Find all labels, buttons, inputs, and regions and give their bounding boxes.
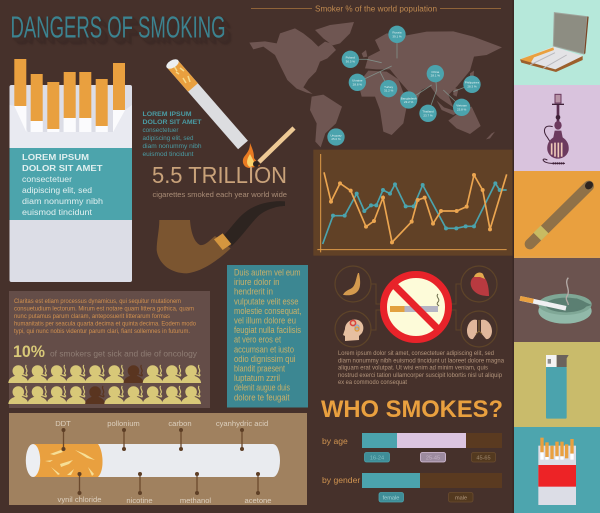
teal panel text: blandit praesent — [234, 364, 285, 374]
icon: pipe — [157, 201, 285, 273]
5.5 trillion statistic — [152, 162, 287, 199]
bubble labels: 28.3 % — [467, 84, 477, 88]
chemical labels: acetone — [244, 496, 272, 505]
icon: heart — [461, 266, 497, 302]
teal panel text — [234, 268, 302, 402]
panel: lighter tile — [514, 342, 600, 427]
map header: Smoker % of the world population — [315, 4, 437, 14]
pack label text: DOLOR SIT AMET — [22, 163, 103, 173]
lit cigarette illustration — [165, 57, 243, 145]
small lorem text block: adipiscing elit, sed — [142, 135, 194, 142]
teal panel text: at vero eros et — [234, 335, 281, 345]
health effects text — [338, 350, 505, 386]
panel: hookah tile — [514, 85, 600, 171]
bubble labels: Turkey — [384, 85, 394, 89]
oncology paragraph: Claritas est etiam processus dynamicus, qui sequitur mutationem — [14, 298, 181, 305]
world map — [249, 22, 502, 147]
pack front flap — [10, 105, 132, 148]
connector lines — [350, 34, 472, 113]
teal panel text: odio dignissim qui — [234, 354, 296, 364]
chemical labels: cyanhydric acid — [216, 419, 268, 428]
title: DANGERS OF SMOKING — [10, 10, 226, 44]
continents — [249, 22, 502, 147]
who smokes heading: WHO SMOKES? — [321, 396, 503, 423]
cigarette diagram — [26, 444, 280, 477]
oncology paragraph: consuetudium lectorum. Mirum est notare quam littera gothica, quam — [14, 306, 194, 312]
bubble labels: 28.8 % — [353, 82, 362, 86]
line chart — [313, 150, 514, 256]
gender tags: male — [455, 496, 467, 502]
icon: brain head — [335, 311, 371, 347]
redraw of cigarette whites over flap — [14, 106, 125, 132]
panel: cigarette chemicals — [9, 413, 307, 505]
teal panel text: feugiat nulla facilisis — [234, 325, 301, 335]
icon: stomach — [335, 266, 371, 302]
bubble labels: 31.2 % — [384, 89, 394, 93]
pack label text — [22, 152, 103, 217]
pack label text: consectetuer — [22, 174, 72, 184]
10% statistic: of smokers get sick and die of oncology — [50, 350, 198, 358]
oncology paragraph: nunc putamus parum claram, anteposuerit litterarum formas — [14, 313, 170, 320]
panel: cigarette case tile — [514, 0, 600, 85]
organ connectors — [371, 284, 461, 330]
people icon array — [8, 365, 201, 404]
oncology paragraph: humanitatis per seacula quarta decima et quinta decima. Eodem modo — [14, 320, 197, 328]
small lorem text block: euismod tincidunt — [142, 151, 194, 158]
chemical labels: nicotine — [126, 496, 153, 505]
age tags: 45-65 — [476, 456, 491, 462]
10% statistic — [13, 342, 198, 361]
5.5 trillion statistic: cigarettes smoked each year world wide — [152, 190, 287, 199]
match and flame — [243, 128, 294, 168]
no smoking sign — [384, 274, 448, 340]
chemical labels: vynil chloride — [58, 495, 101, 504]
by gender bar: by gender — [322, 475, 360, 485]
health effects text: Lorem ipsum dolor sit amet, consectetuer adipiscing elit, sed — [338, 350, 494, 357]
cigarette pack — [10, 59, 132, 282]
age tags: 16-24 — [370, 456, 384, 462]
divider strip between tiles — [514, 256, 600, 258]
bubble labels: China — [431, 70, 440, 74]
crossed cigarette — [390, 294, 439, 312]
pack label text: adipiscing elit, sed — [22, 185, 92, 195]
bubble labels: 25.0 % — [331, 137, 341, 141]
bubble labels — [330, 31, 480, 141]
health effects: organ icons and no-smoking sign — [335, 266, 505, 386]
chart panel — [313, 150, 514, 256]
bubble labels: 23.8 % — [457, 107, 467, 111]
bubble labels: Poland — [346, 56, 355, 60]
gender tags: female — [383, 496, 399, 502]
by age bar — [322, 433, 502, 462]
chemical labels: carbon — [168, 419, 192, 428]
chemical labels: DDT — [55, 419, 71, 428]
icon: lungs — [461, 311, 497, 347]
gender tags — [379, 492, 473, 502]
oncology paragraph: typi, qui nunc nobis videntur parum clari, fiant sollemnes in futurum. — [14, 328, 190, 335]
5.5 trillion statistic: 5.5 TRILLION — [152, 162, 287, 188]
panel: cigar tile — [514, 171, 600, 256]
teal panel text: Duis autem vel eum — [234, 268, 300, 278]
chemical labels: methanol — [180, 496, 211, 505]
teal panel text: accumsan et iusto — [234, 344, 294, 354]
pack label text: LOREM IPSUM — [22, 152, 89, 162]
pack label text: euismod tincidunt — [22, 207, 93, 217]
by gender bar — [322, 473, 502, 502]
chemical labels: pollonium — [107, 419, 140, 428]
teal panel text: molestie consequat, — [234, 306, 302, 316]
small lorem text block: DOLOR SIT AMET — [142, 119, 202, 126]
teal panel text: hendrerit in — [234, 287, 273, 297]
age tags: 25-45 — [426, 456, 440, 462]
pack label text: diam nonummy nibh — [22, 196, 103, 206]
bubble labels: 39.1 % — [392, 34, 402, 38]
teal panel text: iriure dolor in — [234, 277, 280, 287]
small lorem text block: consectetuer — [142, 127, 178, 134]
bubble labels: Vietnam — [456, 104, 468, 108]
chemical pins — [62, 428, 260, 495]
teal panel text: vulputate velit esse — [234, 296, 298, 306]
teal panel text: dolore te feugait — [234, 392, 290, 402]
bubble labels: Ukraine — [352, 79, 363, 83]
bubble labels: 28.1 % — [431, 74, 440, 78]
health effects text: ex ea commodo consequat — [338, 379, 407, 386]
10% statistic: 10% — [13, 342, 45, 361]
teal panel text: delenit augue duis — [234, 383, 290, 393]
orange series — [324, 172, 507, 244]
chemical labels — [55, 419, 272, 505]
data bubbles — [327, 26, 481, 146]
teal panel text: luptatum zzril — [234, 373, 280, 383]
cigarettes in pack — [14, 59, 125, 132]
pack teal label — [10, 148, 132, 220]
panel: oncology — [8, 291, 210, 408]
bubble labels: Thailand — [422, 110, 434, 114]
health effects text: aliquam erat volutpat. Ut wisi enim ad minim veniam, quis — [338, 365, 488, 372]
health effects text: diam nonummy nibh euismod tincidunt ut laoreet dolore magna — [338, 357, 505, 364]
small lorem text block: LOREM IPSUM — [142, 111, 192, 118]
small lorem text block — [142, 111, 202, 158]
age tags — [364, 452, 496, 462]
bubble labels: 36.5 % — [346, 59, 355, 63]
panel: ashtray tile — [514, 258, 600, 342]
bubble labels: 23.2 % — [404, 100, 414, 104]
bubble labels: Bangladesh — [401, 96, 417, 100]
panel: pack tile — [514, 427, 600, 513]
panel: teal text — [227, 265, 308, 408]
bubble labels: Philippines — [465, 81, 480, 85]
bubble labels: Russia — [392, 31, 402, 35]
teal series — [323, 181, 507, 244]
bubble labels: 23.7 % — [423, 113, 433, 117]
bubble labels: Uruguay — [330, 133, 342, 137]
small lorem text block: diam nonummy nibh — [142, 143, 202, 150]
teal panel text: vel illum dolore eu — [234, 316, 296, 326]
chart axes — [317, 154, 507, 252]
oncology paragraph — [14, 298, 197, 335]
left edge of tile column — [512, 0, 514, 513]
health effects text: nostrud exerci tation ullamcorper suscipit lobortis nisl ut aliquip — [338, 372, 503, 379]
by age bar: by age — [322, 436, 348, 446]
